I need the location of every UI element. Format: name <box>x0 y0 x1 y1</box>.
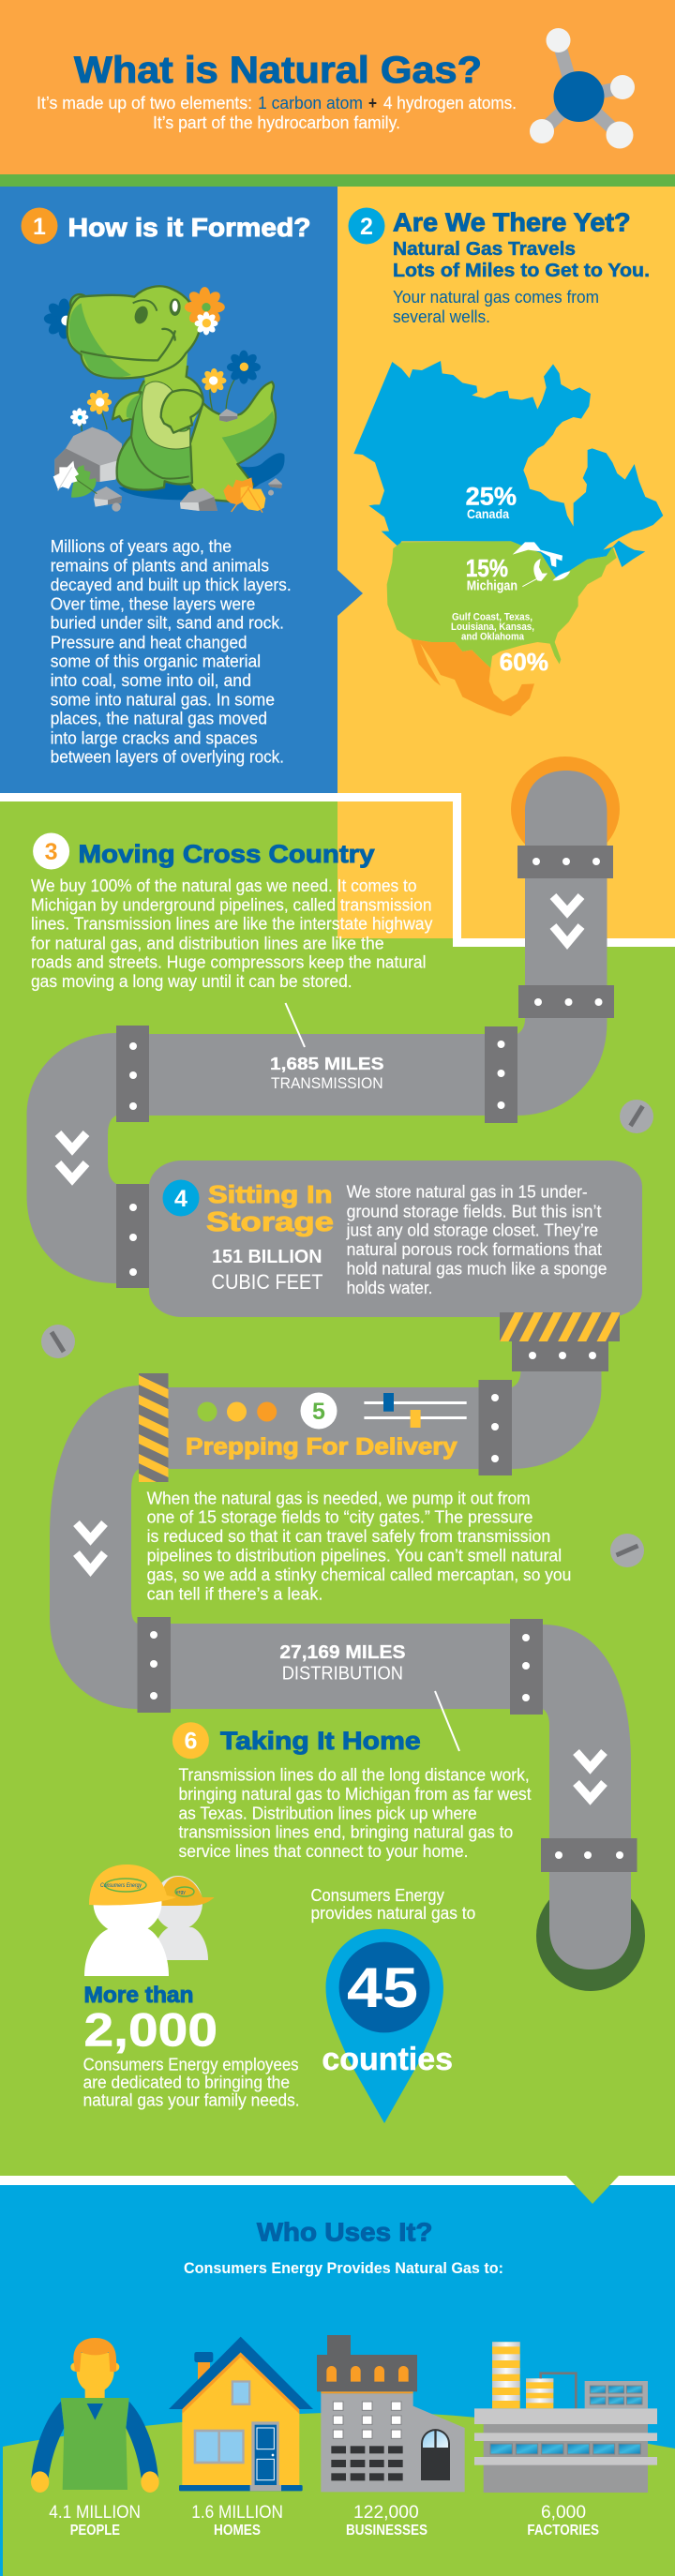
body text: for natural gas, and distribution lines are like the <box>31 934 384 952</box>
badge 1 <box>21 208 58 244</box>
arrow into panel 2 <box>338 570 363 616</box>
badge 4 <box>163 1179 199 1217</box>
body text: one of 15 storage fields to “city gates.” The pressure <box>147 1508 532 1527</box>
stat: distribution miles: 27,169 MILES <box>279 1642 405 1663</box>
stat: distribution miles: DISTRIBUTION <box>282 1664 403 1685</box>
label: Gulf Coast 60% <box>451 611 548 676</box>
body text: is reduced so that it can travel safely from transmission <box>147 1527 550 1546</box>
stat: storage volume: 151 BILLION <box>212 1247 322 1267</box>
stat: employees <box>83 1983 300 2110</box>
body text: gas moving a long way until it can be stored. <box>31 972 352 991</box>
body text: just any old storage closet. They’re <box>346 1221 598 1239</box>
label: Gulf Coast 60%: and Oklahoma <box>461 632 525 643</box>
intro text: several wells. <box>393 307 490 326</box>
indicator lights <box>197 1402 277 1421</box>
hazard band: delivery inlet <box>139 1373 169 1482</box>
stat: counties pin: Consumers Energy <box>311 1886 444 1905</box>
leaves <box>53 461 265 513</box>
heading: Who Uses It? <box>257 2218 432 2247</box>
panel 2 content: are we there yet <box>349 208 663 716</box>
heading: Moving Cross Country <box>79 840 375 868</box>
body text: into large cracks and spaces <box>51 728 258 747</box>
badge 5: 5 <box>312 1399 325 1425</box>
Canada <box>353 361 663 578</box>
stat: storage volume: CUBIC FEET <box>212 1270 322 1294</box>
illustration: dinosaur with flowers and rocks <box>44 286 285 513</box>
body text: service lines that connect to your home. <box>178 1842 469 1861</box>
icon: screw right <box>620 1100 653 1133</box>
label: factories: 6,000 <box>541 2503 586 2523</box>
label: people: PEOPLE <box>70 2523 120 2539</box>
label: businesses <box>346 2503 428 2539</box>
body text: hold natural gas much like a sponge <box>347 1259 607 1278</box>
heading: Storage <box>206 1207 334 1237</box>
label: factories: FACTORIES <box>527 2523 599 2539</box>
stat: transmission miles: TRANSMISSION <box>271 1074 383 1092</box>
icon: house <box>169 2337 313 2491</box>
stat: transmission miles <box>270 1054 384 1092</box>
body text: holds water. <box>347 1279 432 1297</box>
heading: Taking It Home <box>220 1727 421 1755</box>
label: businesses: BUSINESSES <box>346 2523 428 2539</box>
stat: counties pin <box>311 1886 475 2123</box>
subtitle text: 1 carbon atom <box>258 94 363 112</box>
intro text: Your natural gas comes from <box>393 288 599 307</box>
subheading: Natural Gas Travels <box>393 239 576 260</box>
body text: some into natural gas. In some <box>51 690 275 709</box>
body text <box>178 1765 532 1861</box>
flowers <box>44 299 261 427</box>
callout line <box>285 1003 305 1047</box>
stat: counties pin: provides natural gas to <box>311 1904 475 1923</box>
body text <box>346 1183 607 1297</box>
icon: two workers in hard hats: Consumers Energy <box>100 1883 142 1889</box>
body text <box>147 1489 571 1603</box>
label: people <box>49 2503 141 2539</box>
badge 2 <box>349 208 384 244</box>
body text: buried under silt, sand and rock. <box>51 614 284 633</box>
stat: employees: 2,000 <box>84 2003 218 2056</box>
label: Michigan 15%: 15% <box>466 554 508 582</box>
head <box>68 286 200 378</box>
panel: 1 how is it formed <box>0 187 363 793</box>
subtitle text: It’s part of the hydrocarbon family. <box>153 113 400 132</box>
snout bump <box>70 294 89 313</box>
body text: Over time, these layers were <box>51 594 255 613</box>
label: Canada 25%: 25% <box>466 482 517 510</box>
map: North America <box>353 361 663 716</box>
subtitle text: + <box>368 94 377 112</box>
stat: counties pin: counties <box>322 2042 453 2077</box>
icon: two workers in hard hats: ergy <box>176 1890 186 1895</box>
label: Michigan 15%: Michigan <box>467 578 518 593</box>
subtitle text: It’s made up of two elements: <box>37 94 252 112</box>
callout line <box>435 1691 459 1751</box>
sliders <box>364 1393 467 1428</box>
body text: Michigan by underground pipelines, called transmission <box>31 895 431 914</box>
left arm <box>112 392 142 421</box>
panel: who uses it <box>0 2176 675 2576</box>
heading <box>206 1180 334 1237</box>
label: businesses: 122,000 <box>353 2503 419 2523</box>
body text: transmission lines end, bringing natural gas to <box>178 1823 513 1842</box>
section 3: moving cross country <box>31 832 432 1092</box>
arrow notch <box>566 2176 619 2204</box>
badge 1: 1 <box>33 214 46 240</box>
body text: into coal, some into oil, and <box>51 671 251 690</box>
flow chevrons <box>58 896 604 1799</box>
body text: between layers of overlying rock. <box>51 748 284 767</box>
subtitle text <box>37 94 517 132</box>
badge 3: 3 <box>45 839 58 865</box>
head flowers <box>185 287 225 335</box>
badge 5 <box>300 1393 338 1429</box>
dino body <box>117 382 192 490</box>
panel: header <box>0 0 675 187</box>
stat: employees: are dedicated to bringing the <box>83 2074 290 2092</box>
hazard band: storage outlet <box>500 1312 621 1341</box>
body text: We buy 100% of the natural gas we need. It comes to <box>31 876 416 895</box>
body text: Transmission lines do all the long distance work, <box>178 1765 530 1784</box>
section 4: sitting in storage <box>163 1179 607 1297</box>
shadow pool <box>119 453 285 500</box>
subtitle text: 4 hydrogen atoms. <box>383 94 517 112</box>
badge 2: 2 <box>360 214 373 240</box>
stat: employees: natural gas your family needs. <box>83 2091 300 2110</box>
Mexico <box>411 639 534 716</box>
body text: can tell if there’s a leak. <box>147 1584 322 1603</box>
label: homes <box>191 2503 283 2539</box>
body text: some of this organic material <box>51 652 261 671</box>
body text: Millions of years ago, the <box>51 537 232 556</box>
pipeline: all pipe segments <box>26 756 645 1991</box>
icon: business building <box>317 2335 465 2492</box>
panel: white border lines of section 3 <box>0 793 675 947</box>
subheading: Consumers Energy Provides Natural Gas to: <box>184 2259 503 2277</box>
label: people: 4.1 MILLION <box>49 2503 141 2523</box>
label: homes: 1.6 MILLION <box>191 2503 283 2523</box>
badge 3 <box>33 832 69 870</box>
badge 6 <box>172 1722 209 1759</box>
body text <box>31 876 432 991</box>
flanges <box>116 846 638 1872</box>
body text: roads and streets. Huge compressors keep the natural <box>31 953 426 972</box>
icon: two workers in hard hats <box>84 1865 215 1976</box>
body text: gas, so we add a stinky chemical called mercaptan, so you <box>147 1565 571 1584</box>
section 6: taking it home <box>172 1722 532 1861</box>
pipe end: dark green hole <box>536 1880 645 1991</box>
stat: distribution miles <box>279 1642 405 1685</box>
label: factories <box>527 2503 599 2539</box>
label: Gulf Coast 60%: 60% <box>500 648 548 676</box>
stat: employees: Consumers Energy employees <box>83 2055 299 2074</box>
body text: When the natural gas is needed, we pump it out from <box>147 1489 531 1507</box>
body text: places, the natural gas moved <box>51 710 267 728</box>
subheading <box>393 239 650 281</box>
badge 4: 4 <box>174 1186 188 1212</box>
icon: map pin <box>326 1929 443 2123</box>
body text: Pressure and heat changed <box>51 633 248 651</box>
big rock <box>54 427 122 482</box>
icon: person <box>31 2338 159 2493</box>
icon: screw left <box>41 1325 75 1358</box>
label: Gulf Coast 60%: Louisiana, Kansas, <box>451 622 534 633</box>
stat: employees: More than <box>84 1983 193 2008</box>
flange bolts <box>129 858 623 1859</box>
label: Michigan 15% <box>466 554 518 593</box>
right arm <box>161 390 203 433</box>
label: Canada 25%: Canada <box>467 506 509 521</box>
body text: lines. Transmission lines are like the interstate highway <box>31 915 432 934</box>
title: What is Natural Gas? <box>74 50 482 91</box>
subheading: Lots of Miles to Get to You. <box>393 261 650 281</box>
stat: storage volume <box>212 1247 322 1294</box>
intro text <box>393 288 599 326</box>
dino tail and hind <box>189 382 276 502</box>
label: homes: HOMES <box>214 2523 261 2539</box>
body text: We store natural gas in 15 under- <box>347 1183 588 1202</box>
heading: Are We There Yet? <box>393 208 631 237</box>
body text: pipelines to distribution pipelines. You can’t smell natural <box>147 1546 562 1565</box>
label: Gulf Coast 60%: Gulf Coast, Texas, <box>452 611 532 622</box>
USA <box>387 541 617 668</box>
pipe start: orange glow <box>511 756 620 861</box>
icon: methane molecule <box>530 28 635 148</box>
icon: factory <box>474 2342 657 2493</box>
body text <box>51 537 292 767</box>
small rocks <box>94 409 282 512</box>
heading: Sitting In <box>208 1180 332 1208</box>
heading: Prepping For Delivery <box>186 1434 458 1460</box>
belly <box>142 382 190 449</box>
body text: remains of plants and animals <box>51 557 269 576</box>
icon: screw lower right <box>610 1534 644 1567</box>
stat: counties pin: 45 <box>347 1956 418 2019</box>
Great Lakes <box>513 542 570 581</box>
body text: decayed and built up thick layers. <box>51 576 292 594</box>
stat: transmission miles: 1,685 MILES <box>270 1054 384 1073</box>
body text: as Texas. Distribution lines pick up where <box>178 1804 477 1822</box>
panel: 2 are we there yet background <box>338 187 675 938</box>
body text: ground storage fields. But this isn’t <box>347 1202 601 1221</box>
body text: bringing natural gas to Michigan from as far west <box>178 1785 532 1804</box>
heading: How is it Formed? <box>68 213 311 242</box>
badge 6: 6 <box>184 1729 197 1755</box>
section 5: prepping for delivery <box>147 1393 571 1751</box>
body text: natural porous rock formations that <box>347 1240 602 1259</box>
ground hill <box>3 2412 675 2576</box>
